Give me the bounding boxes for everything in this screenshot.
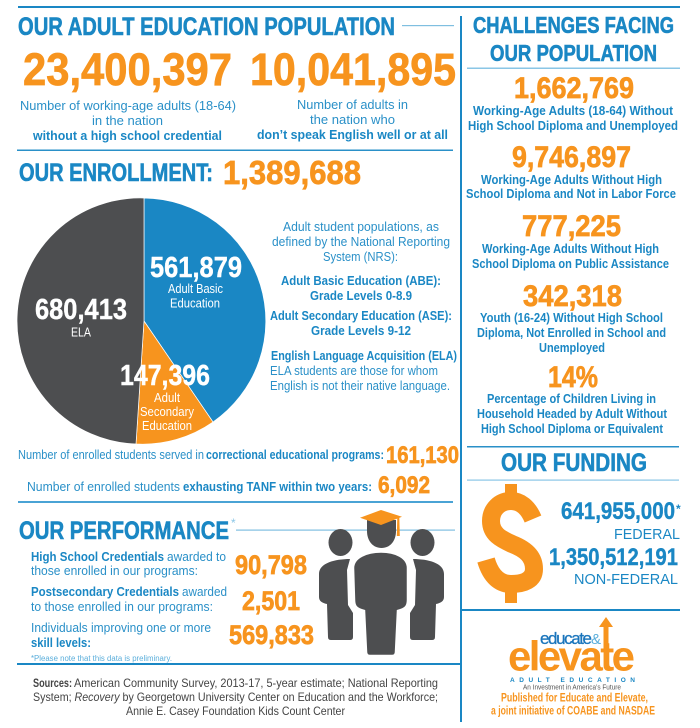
pie chart: enrollment by program: ELA — [71, 326, 92, 340]
stat: unemployed: Working-Age Adults (18-64) Without — [473, 104, 674, 118]
stat: TANF — [27, 472, 430, 499]
stat: children: 14% — [548, 361, 598, 394]
stat: correctional programs — [18, 442, 459, 469]
sources: Sources: — [33, 676, 72, 690]
stat: children: High School Diploma or Equivalent — [481, 422, 664, 436]
panel: performance — [19, 510, 455, 663]
stat: adults without credential — [20, 44, 236, 143]
footnote: *Please note that this data is preliminary. — [31, 654, 172, 663]
icon: up arrow — [599, 617, 613, 652]
stat: youth: Unemployed — [539, 341, 605, 355]
pie chart: enrollment by program: 561,879 — [150, 252, 242, 284]
stat: adults with limited English: don’t speak English well or at all — [257, 128, 448, 142]
stat: high school credentials: those enrolled in our programs: — [31, 563, 198, 578]
panel: challenges — [466, 12, 678, 436]
text block: NRS definitions: ELA students are those for whom — [270, 363, 438, 378]
publisher note — [491, 690, 655, 718]
stat: TANF: Number of enrolled students — [27, 479, 180, 494]
heading: challenges facing our population: OUR POPULATION — [490, 40, 657, 66]
text block: NRS definitions: defined by the National Reporting — [272, 234, 450, 249]
stat: youth: Diploma, Not Enrolled in School and — [477, 326, 666, 340]
text block: NRS definitions: Grade Levels 0-8.9 — [310, 289, 412, 303]
logo wordmark: ADULT EDUCATION — [510, 677, 635, 684]
sources: System; Recovery by Georgetown University Center on Education and the Workforce; — [33, 690, 438, 704]
stat: adults with limited English: the nation who — [310, 112, 395, 127]
stat: postsecondary credentials — [31, 584, 300, 616]
stat: postsecondary credentials: Postsecondary Credentials — [31, 585, 179, 599]
stat: federal funding: 641,955,000 — [561, 498, 675, 525]
logo wordmark: & — [591, 631, 601, 648]
stat: not in labor force: School Diploma and Not in Labor Force — [466, 187, 676, 201]
heading asterisk: * — [231, 516, 236, 530]
stat: public assistance: School Diploma on Public Assistance — [472, 257, 669, 271]
icon: dollar sign — [486, 484, 534, 603]
stat: high school credentials: 90,798 — [235, 550, 307, 580]
stat: correctional programs: Number of enrolled students served in — [18, 447, 204, 462]
stat: correctional programs: 161,130 — [386, 442, 459, 469]
stat: adults without credential: in the nation — [92, 113, 163, 128]
stat: children: Household Headed by Adult Without — [477, 407, 668, 421]
stat: total enrollment: 1,389,688 — [223, 154, 361, 191]
sources: American Community Survey, 2013-17, 5-year estimate; National Reporting — [74, 676, 438, 690]
stat: federal funding: FEDERAL — [614, 526, 680, 543]
text block: NRS definitions: Adult student populations, as — [283, 219, 439, 234]
logo wordmark: educate — [540, 629, 592, 648]
stat: postsecondary credentials: 2,501 — [242, 586, 300, 616]
stat: children: Percentage of Children Living in — [487, 392, 656, 406]
panel: adult education population — [18, 13, 456, 143]
stat: not in labor force: Working-Age Adults Without High — [481, 173, 662, 187]
stat: not in labor force — [466, 141, 676, 201]
stat: correctional programs: correctional educational programs: — [206, 448, 384, 462]
stat: postsecondary credentials: to those enrolled in our programs: — [31, 599, 213, 614]
pie chart: enrollment by program: Education — [142, 419, 192, 433]
stat: postsecondary credentials: awarded — [182, 584, 227, 599]
text block: NRS definitions: English is not their native language. — [270, 378, 450, 393]
heading rule — [236, 530, 455, 531]
stat: public assistance: Working-Age Adults Without High — [482, 242, 659, 256]
sources: Annie E. Casey Foundation Kids Count Center — [126, 704, 345, 718]
logo wordmark: An Investment in America’s Future — [523, 684, 621, 692]
panel: funding — [486, 449, 681, 603]
stat: federal funding: * — [676, 502, 681, 516]
text block: NRS definitions: System (NRS): — [323, 249, 398, 264]
stat: skill levels: 569,833 — [229, 620, 314, 650]
pie chart: enrollment by program: Adult Basic — [168, 282, 223, 296]
pie chart: enrollment by program — [17, 198, 266, 444]
publisher note: Published for Educate and Elevate, — [501, 690, 648, 704]
stat: adults without credential: Number of working-age adults (18-64) — [20, 98, 236, 113]
logo: educate and elevate — [491, 617, 655, 718]
logo wordmark: elevate — [508, 632, 635, 680]
stat: skill levels — [31, 620, 314, 650]
stat: non-federal funding — [549, 544, 678, 588]
stat: federal funding — [561, 498, 681, 543]
pie chart: enrollment by program: Secondary — [140, 405, 195, 419]
panel: enrollment — [17, 154, 459, 499]
stat: unemployed — [468, 72, 678, 133]
heading: our enrollment: OUR ENROLLMENT: — [19, 159, 213, 187]
pie chart: enrollment by program: 147,396 — [120, 360, 210, 392]
pie chart: enrollment by program: Adult — [154, 391, 180, 405]
icon: graduates group — [319, 510, 444, 656]
text block: NRS definitions: English Language Acquisition (ELA) — [271, 349, 457, 363]
stat: unemployed: 1,662,769 — [514, 72, 634, 105]
stat: youth — [477, 280, 666, 355]
stat: non-federal funding: 1,350,512,191 — [549, 544, 678, 571]
text block: NRS definitions: Adult Secondary Education (ASE): — [270, 309, 452, 323]
sources — [33, 676, 438, 718]
heading: challenges facing our population — [473, 12, 674, 66]
stat: adults with limited English: 10,041,895 — [250, 44, 456, 95]
stat: adults without credential: without a high school credential — [32, 129, 222, 143]
stat: adults with limited English: Number of adults in — [297, 97, 408, 112]
pie chart: enrollment by program: Education — [170, 296, 220, 310]
heading: our funding: OUR FUNDING — [501, 449, 647, 477]
stat: adults with limited English — [250, 44, 456, 142]
stat: children — [477, 361, 668, 436]
stat: skill levels: Individuals improving one or more — [31, 620, 211, 635]
stat: public assistance — [472, 210, 669, 271]
stat: TANF: exhausting TANF within two years: — [183, 480, 372, 494]
stat: high school credentials: awarded to — [167, 549, 226, 564]
stat: adults without credential: 23,400,397 — [23, 44, 232, 95]
text block: NRS definitions: Grade Levels 9-12 — [311, 324, 411, 338]
stat: high school credentials: High School Credentials — [31, 550, 164, 564]
text block: NRS definitions: Adult Basic Education (ABE): — [281, 274, 441, 288]
stat: TANF: 6,092 — [378, 472, 430, 499]
stat: youth: Youth (16-24) Without High School — [480, 311, 663, 325]
stat: non-federal funding: NON-FEDERAL — [574, 571, 678, 588]
stat: skill levels: skill levels: — [31, 636, 91, 650]
heading: our adult education population: OUR ADULT EDUCATION POPULATION — [18, 13, 395, 41]
pie chart: enrollment by program: 680,413 — [35, 294, 127, 326]
stat: public assistance: 777,225 — [522, 210, 621, 243]
stat: high school credentials — [31, 549, 307, 580]
text block: NRS definitions — [270, 219, 457, 393]
stat: not in labor force: 9,746,897 — [512, 141, 631, 174]
stat: youth: 342,318 — [523, 280, 622, 313]
stat: unemployed: High School Diploma and Unemployed — [468, 119, 678, 133]
heading: our performance: OUR PERFORMANCE — [19, 517, 229, 545]
heading rule — [402, 25, 454, 26]
